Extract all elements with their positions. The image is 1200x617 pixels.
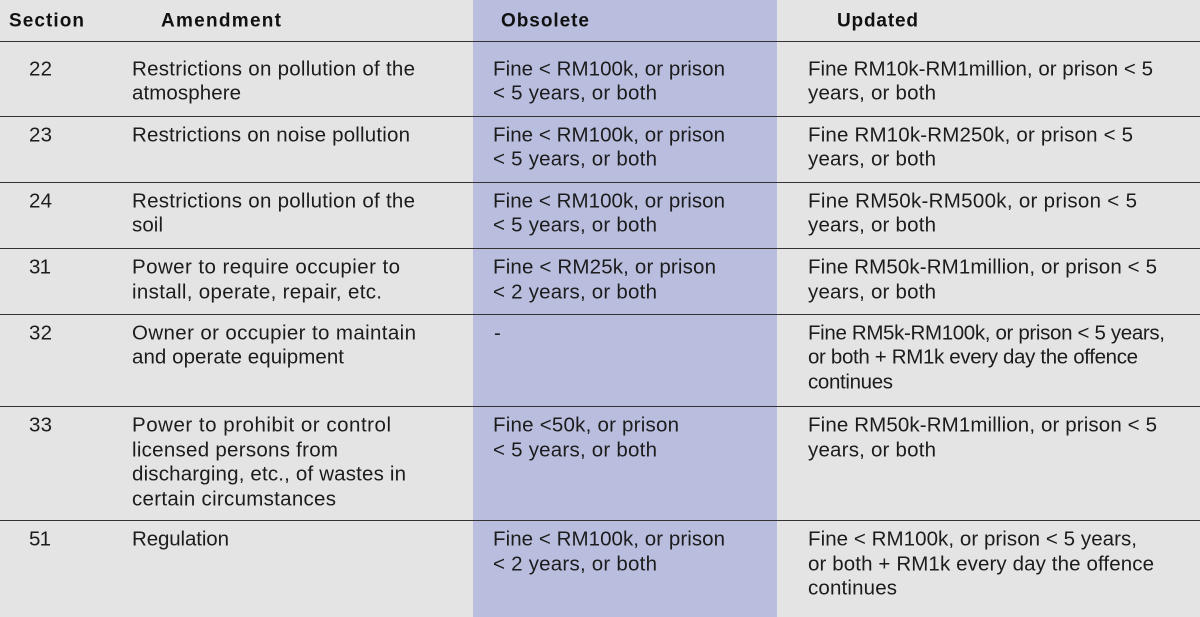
updated penalty 24: years, or both: [808, 214, 936, 236]
row: section 31: [29, 256, 1157, 304]
updated penalty 51: [808, 528, 1154, 600]
amendment text 33: licensed persons from: [132, 438, 338, 462]
updated penalty 32: Fine RM5k-RM100k, or prison < 5 years,: [808, 322, 1165, 344]
amendment text 22: [132, 58, 415, 104]
updated penalty 32: continues: [808, 370, 893, 394]
obsolete penalty 32: -: [494, 322, 501, 344]
updated penalty 32: [808, 322, 1165, 394]
row: section 23: [29, 124, 1133, 170]
updated penalty 31: years, or both: [808, 280, 936, 304]
amendment text 31: Power to require occupier to: [132, 256, 400, 278]
updated penalty 51: Fine < RM100k, or prison < 5 years,: [808, 528, 1137, 550]
section number 22: 22: [29, 58, 52, 80]
amendment text 51: Regulation: [132, 528, 229, 550]
section number 33: 33: [29, 414, 52, 436]
obsolete penalty 22: < 5 years, or both: [493, 82, 657, 104]
obsolete penalty 33: < 5 years, or both: [493, 438, 657, 462]
section number 24: 24: [29, 190, 52, 212]
obsolete penalty 51: < 2 years, or both: [493, 552, 657, 576]
amendment text 33: discharging, etc., of wastes in: [132, 462, 406, 486]
updated penalty 31: Fine RM50k-RM1million, or prison < 5: [808, 256, 1157, 278]
obsolete penalty 31: Fine < RM25k, or prison: [493, 256, 716, 278]
section number 31: 31: [29, 256, 51, 278]
obsolete penalty 23: [493, 124, 725, 170]
row: section 22: [29, 58, 1153, 104]
heading: Obsolete: Obsolete: [501, 10, 589, 32]
updated penalty 23: [808, 124, 1133, 170]
updated penalty 23: Fine RM10k-RM250k, or prison < 5: [808, 124, 1133, 146]
amendment text 33: [132, 414, 406, 510]
updated penalty 32: or both + RM1k every day the offence: [808, 346, 1138, 368]
updated penalty 33: years, or both: [808, 438, 936, 462]
obsolete penalty 33: Fine <50k, or prison: [493, 414, 679, 436]
amendment text 24: soil: [132, 214, 163, 236]
updated penalty 23: years, or both: [808, 148, 936, 170]
obsolete penalty 24: [493, 190, 725, 236]
obsolete penalty 22: Fine < RM100k, or prison: [493, 58, 725, 80]
row: section 51: [29, 528, 1154, 600]
updated penalty 33: [808, 414, 1157, 462]
updated penalty 31: [808, 256, 1157, 304]
obsolete penalty 51: [493, 528, 725, 576]
amendment text 24: Restrictions on pollution of the: [132, 190, 415, 212]
heading: Amendment: Amendment: [161, 10, 282, 32]
header row: [9, 10, 918, 32]
amendment text 22: atmosphere: [132, 82, 241, 104]
row: section 24: [29, 190, 1137, 236]
obsolete penalty 24: < 5 years, or both: [493, 214, 657, 236]
updated penalty 22: years, or both: [808, 82, 936, 104]
obsolete penalty 31: < 2 years, or both: [493, 280, 657, 304]
obsolete penalty 23: Fine < RM100k, or prison: [493, 124, 725, 146]
obsolete penalty 31: [493, 256, 716, 304]
amendment text 31: install, operate, repair, etc.: [132, 280, 382, 304]
amendment text 24: [132, 190, 415, 236]
updated penalty 33: Fine RM50k-RM1million, or prison < 5: [808, 414, 1157, 436]
amendment text 31: [132, 256, 400, 304]
amendment text 23: Restrictions on noise pollution: [132, 124, 410, 146]
updated penalty 51: or both + RM1k every day the offence: [808, 552, 1154, 576]
amendment text 33: certain circumstances: [132, 488, 336, 510]
heading: Updated: Updated: [837, 10, 918, 32]
row: section 32: [29, 322, 1165, 394]
obsolete penalty 22: [493, 58, 725, 104]
amendment text 22: Restrictions on pollution of the: [132, 58, 415, 80]
updated penalty 22: [808, 58, 1153, 104]
section number 23: 23: [29, 124, 52, 146]
updated penalty 24: Fine RM50k-RM500k, or prison < 5: [808, 190, 1137, 212]
updated penalty 24: [808, 190, 1137, 236]
updated penalty 22: Fine RM10k-RM1million, or prison < 5: [808, 58, 1153, 80]
amendment text 32: Owner or occupier to maintain: [132, 322, 416, 344]
section number 51: 51: [29, 528, 51, 550]
panel: obsolete column highlight: [473, 0, 777, 617]
heading: Section: Section: [9, 10, 84, 32]
obsolete penalty 51: Fine < RM100k, or prison: [493, 528, 725, 550]
section number 32: 32: [29, 322, 52, 344]
amendment text 32: [132, 322, 416, 368]
obsolete penalty 23: < 5 years, or both: [493, 148, 657, 170]
obsolete penalty 24: Fine < RM100k, or prison: [493, 190, 725, 212]
amendment text 33: Power to prohibit or control: [132, 414, 391, 436]
obsolete penalty 33: [493, 414, 679, 462]
updated penalty 51: continues: [808, 576, 897, 600]
amendment text 32: and operate equipment: [132, 346, 344, 368]
row: section 33: [29, 414, 1157, 510]
